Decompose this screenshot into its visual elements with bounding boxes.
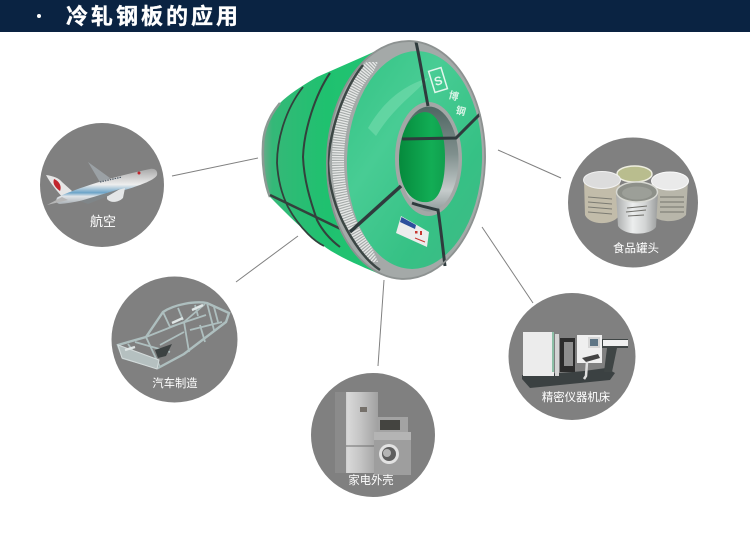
front can bbox=[616, 193, 658, 234]
rim strap bbox=[328, 65, 380, 270]
logo text: 钢 bbox=[454, 103, 467, 118]
circle: appliances bbox=[311, 373, 435, 497]
hole green inner bbox=[399, 112, 445, 202]
circle: automotive bbox=[112, 276, 238, 402]
header bullet bbox=[37, 14, 41, 18]
header bar bbox=[0, 0, 750, 32]
logo text: 博 bbox=[447, 88, 460, 103]
rim teeth bbox=[332, 62, 378, 262]
icon: cans bbox=[584, 166, 688, 234]
circle: precision machine tools bbox=[508, 293, 636, 420]
washing machine bbox=[374, 432, 411, 475]
right can bbox=[652, 180, 688, 221]
knurled rim bbox=[323, 38, 489, 282]
circle: food cans bbox=[568, 138, 698, 268]
green face bbox=[343, 49, 486, 271]
coil body bbox=[263, 48, 420, 275]
outer edge bbox=[323, 38, 489, 282]
logo bbox=[429, 68, 447, 92]
circle: aviation bbox=[40, 123, 164, 247]
logo text bbox=[447, 88, 467, 118]
straps on face bbox=[350, 42, 480, 266]
hole interior bbox=[400, 106, 458, 212]
refrigerator bbox=[335, 392, 378, 473]
title: 冷轧钢板的应用 bbox=[66, 4, 241, 29]
left can bbox=[584, 180, 620, 223]
hole rim bbox=[395, 102, 462, 216]
label: 汽车制造 bbox=[152, 376, 198, 390]
icon: car frame bbox=[118, 302, 229, 369]
connector lines bbox=[172, 150, 561, 366]
icon: appliances bbox=[335, 392, 411, 475]
icon: airplane bbox=[46, 162, 157, 205]
body edge bbox=[263, 103, 280, 197]
icon: machine tool bbox=[522, 332, 628, 388]
back can bbox=[617, 166, 652, 182]
body straps bbox=[270, 73, 347, 247]
microwave bbox=[378, 417, 408, 432]
steel coil bbox=[263, 38, 489, 282]
label: 食品罐头 bbox=[613, 241, 659, 255]
label: 航空 bbox=[90, 214, 116, 229]
face highlight bbox=[368, 78, 428, 136]
label: 精密仪器机床 bbox=[542, 390, 611, 404]
product label bbox=[396, 216, 429, 247]
label: 家电外壳 bbox=[348, 473, 394, 487]
logo: S bbox=[432, 73, 444, 89]
